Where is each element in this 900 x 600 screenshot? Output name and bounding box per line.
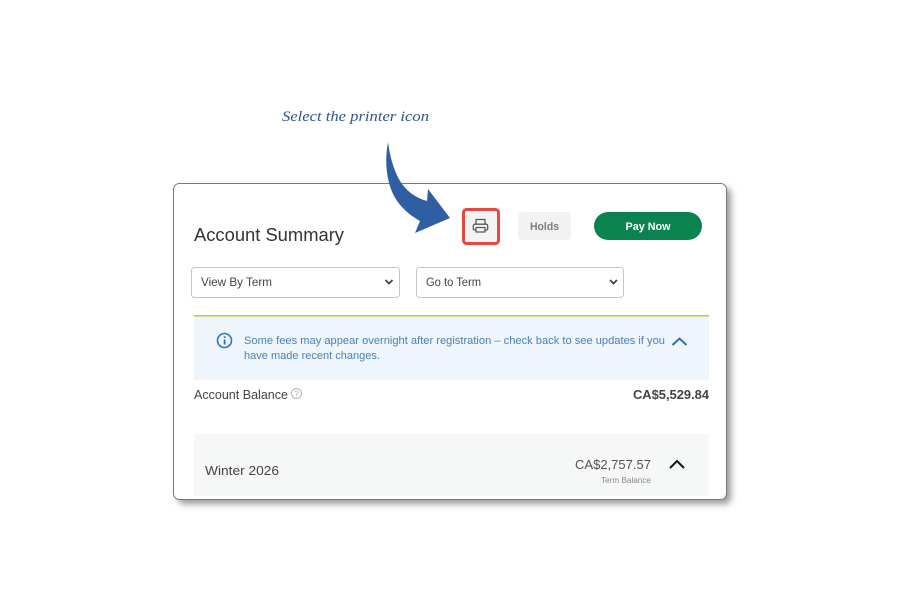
term panel: winter 2026 <box>194 434 709 496</box>
button: pay now <box>594 212 702 240</box>
account balance row: Account Balance <box>194 388 288 402</box>
instruction text: Select the printer icon <box>282 109 429 125</box>
icon: printer button with red highlight <box>464 210 498 244</box>
term panel: winter 2026: CA$2,757.57 <box>575 457 651 472</box>
icon: help: ? <box>294 390 299 398</box>
panel: account summary card <box>174 184 731 504</box>
icon: info <box>218 334 232 348</box>
dropdown: go to term: Go to Term <box>426 277 481 289</box>
dropdown: view by term <box>192 268 400 298</box>
icon: collapse chevron <box>670 461 684 468</box>
notice banner <box>194 315 709 380</box>
notice text: have made recent changes. <box>244 350 380 362</box>
term panel: winter 2026: Winter 2026 <box>205 464 279 478</box>
dropdown: go to term <box>416 268 624 298</box>
account balance row <box>194 388 709 402</box>
button: pay now: Pay Now <box>626 221 671 233</box>
notice text: Some fees may appear overnight after registration – check back to see updates if you <box>244 335 665 347</box>
icon: help <box>292 388 302 398</box>
heading: account summary: Account Summary <box>194 225 344 245</box>
arrow: pointing to printer icon <box>386 142 450 233</box>
icon: collapse chevron <box>672 338 686 345</box>
term panel: winter 2026: Term Balance <box>601 476 652 485</box>
account balance row: CA$5,529.84 <box>633 388 709 402</box>
button: holds <box>518 212 571 240</box>
button: holds: Holds <box>530 221 559 233</box>
dropdown: view by term: View By Term <box>201 277 272 289</box>
